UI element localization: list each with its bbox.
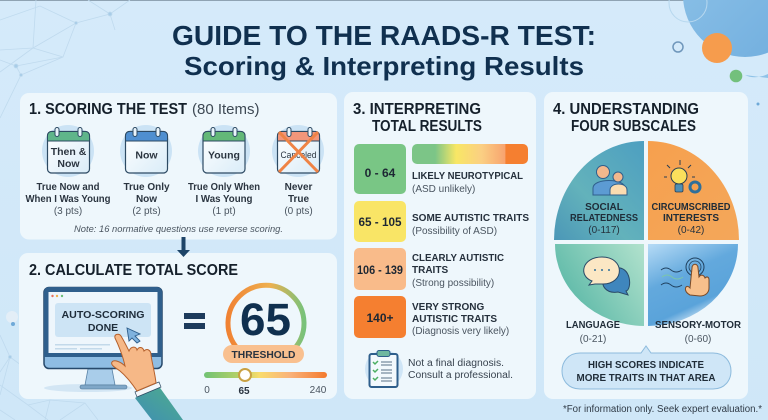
label: sensory-motor: (0-60) (685, 334, 711, 345)
callout: high scores: HIGH SCORES INDICATE (588, 360, 704, 371)
calendar: cancelled: Canceled (280, 150, 316, 160)
calendar: now: Now (135, 150, 158, 162)
calendar: then and now: Now (57, 158, 80, 170)
gradient scale bar (412, 144, 528, 164)
heading: interpreting (353, 101, 482, 135)
quadrant: circumscribed interests (648, 141, 739, 240)
pill: threshold: THRESHOLD (232, 349, 296, 361)
label: auto-scoring done (62, 309, 144, 334)
gauge: threshold 65 (228, 285, 304, 349)
quadrant: social relatedness: SOCIAL (585, 202, 623, 213)
icon: monitor (44, 287, 162, 392)
decoration: network bottom left (0, 325, 98, 420)
label: auto-scoring done: AUTO-SCORING (62, 309, 144, 321)
decoration: circles top right (669, 0, 768, 106)
label: auto-scoring done: DONE (88, 322, 118, 334)
icon: pointing hand (112, 334, 183, 420)
heading: subscales: FOUR SUBSCALES (571, 118, 696, 135)
range: 140+ (354, 296, 406, 338)
calendar: young (198, 125, 250, 177)
caption: 0 pts (284, 182, 313, 217)
label: sensory-motor: SENSORY-MOTOR (655, 320, 742, 331)
icon: touch and waves (661, 258, 709, 296)
panel: interpreting total results (344, 92, 536, 399)
text: very strong autistic traits: (Diagnosis very likely) (412, 326, 509, 337)
heading: calculate: 2. CALCULATE TOTAL SCORE (29, 262, 238, 279)
icon: clipboard (365, 350, 403, 388)
text: very strong autistic traits: AUTISTIC TRAITS (412, 314, 497, 325)
text: some autistic traits: (Possibility of ASD) (412, 226, 497, 237)
label: sensory-motor (655, 320, 742, 345)
text: likely neurotypical (412, 171, 523, 195)
heading: scoring: 1. SCORING THE TEST(80 Items) (29, 101, 260, 118)
panel: understanding four subscales (544, 92, 748, 399)
heading: interpreting: 3. INTERPRETING (353, 101, 481, 118)
decoration: network top left (0, 0, 130, 118)
text: some autistic traits (412, 213, 529, 237)
calendar: cancelled (272, 125, 324, 177)
title: Scoring & Interpreting Results (184, 51, 584, 81)
heading: subscales (553, 101, 699, 135)
quadrant: language (555, 244, 644, 326)
text: some autistic traits: SOME AUTISTIC TRAITS (412, 213, 529, 224)
range: 106-139: 106 - 139 (357, 265, 403, 277)
text: not a final diagnosis: Not a final diagnosis. (408, 358, 504, 369)
text: clearly autistic traits: CLEARLY AUTISTIC (412, 253, 504, 264)
caption: 3 pts: (3 pts) (54, 206, 82, 217)
arrow: step 1 to step 2 (177, 237, 190, 257)
slider scale: 240 (310, 385, 327, 396)
text: clearly autistic traits: TRAITS (412, 265, 448, 276)
quadrant: social relatedness (554, 141, 644, 240)
caption: 3 pts (26, 182, 110, 217)
caption: 2 pts: Now (136, 194, 157, 205)
caption: 1 pt (188, 182, 260, 217)
text: not a final diagnosis: Consult a professional. (408, 370, 513, 381)
quadrant: circumscribed interests: (0-42) (678, 225, 704, 236)
decoration: dots left (6, 311, 35, 347)
calendar: then and now: Then & (51, 146, 87, 158)
title: GUIDE TO THE RAADS-R TEST: (172, 20, 596, 51)
label: language: LANGUAGE (566, 320, 620, 331)
range: 106-139 (354, 248, 406, 290)
callout: high scores: MORE TRAITS IN THAT AREA (576, 373, 716, 384)
caption: 1 pt: True Only When (188, 182, 260, 193)
text: clearly autistic traits: (Strong possibility) (412, 278, 494, 289)
caption: 3 pts: True Now and (36, 182, 100, 193)
text: very strong autistic traits: VERY STRONG (412, 302, 484, 313)
quadrant: sensory-motor (648, 244, 738, 326)
slider scale: 0 (204, 385, 210, 396)
icon: cursor (127, 328, 140, 343)
icon: people (593, 166, 627, 195)
panel: scoring the test (20, 93, 337, 240)
range: 140+: 140+ (366, 311, 394, 325)
caption: 0 pts: Never (285, 182, 312, 193)
quadrant: circumscribed interests: CIRCUMSCRIBED (652, 202, 730, 213)
caption: 0 pts: (0 pts) (284, 206, 313, 217)
range: 0-64 (354, 144, 406, 194)
quadrant: circumscribed interests: INTERESTS (663, 213, 719, 224)
slider scale: 65 (238, 386, 250, 397)
calendar: then and now (42, 125, 94, 177)
heading: subscales: 4. UNDERSTANDING (553, 101, 699, 118)
text: not a final diagnosis (408, 358, 513, 381)
range: 65-105: 65 - 105 (358, 217, 402, 229)
caption: 2 pts (123, 182, 170, 217)
text: clearly autistic traits (412, 253, 504, 289)
note: reverse scoring: Note: 16 normative questions use reverse scoring. (74, 224, 283, 235)
calendar: now (120, 125, 172, 177)
pill: threshold (223, 345, 304, 363)
icon: speech bubbles (584, 257, 630, 295)
caption: 3 pts: When I Was Young (26, 194, 110, 205)
callout: high scores (562, 346, 731, 389)
label: language (566, 320, 620, 345)
caption: 1 pt: (1 pt) (212, 206, 236, 217)
heading: interpreting: TOTAL RESULTS (372, 118, 482, 135)
footnote: *For information only. Seek expert evaluation.* (563, 404, 762, 415)
label: language: (0-21) (580, 334, 606, 345)
panel: calculate total score (19, 253, 337, 420)
caption: 0 pts: True (288, 194, 309, 205)
equals sign (184, 313, 205, 329)
text: likely neurotypical: LIKELY NEUROTYPICAL (412, 171, 523, 182)
value: 65: 65 (240, 294, 291, 345)
slider scale (204, 369, 327, 397)
text: likely neurotypical: (ASD unlikely) (412, 184, 475, 195)
icon: light bulb and gear (664, 160, 700, 192)
text: very strong autistic traits (412, 302, 509, 337)
range: 65-105 (354, 201, 406, 242)
caption: 2 pts: (2 pts) (132, 206, 161, 217)
range: 0-64: 0 - 64 (365, 166, 396, 180)
quadrant: social relatedness: RELATEDNESS (570, 213, 638, 224)
caption: 1 pt: I Was Young (196, 194, 252, 205)
title (172, 20, 596, 81)
caption: 2 pts: True Only (123, 182, 170, 193)
quadrant: social relatedness: (0-117) (588, 225, 620, 236)
calendar: young: Young (208, 150, 240, 162)
